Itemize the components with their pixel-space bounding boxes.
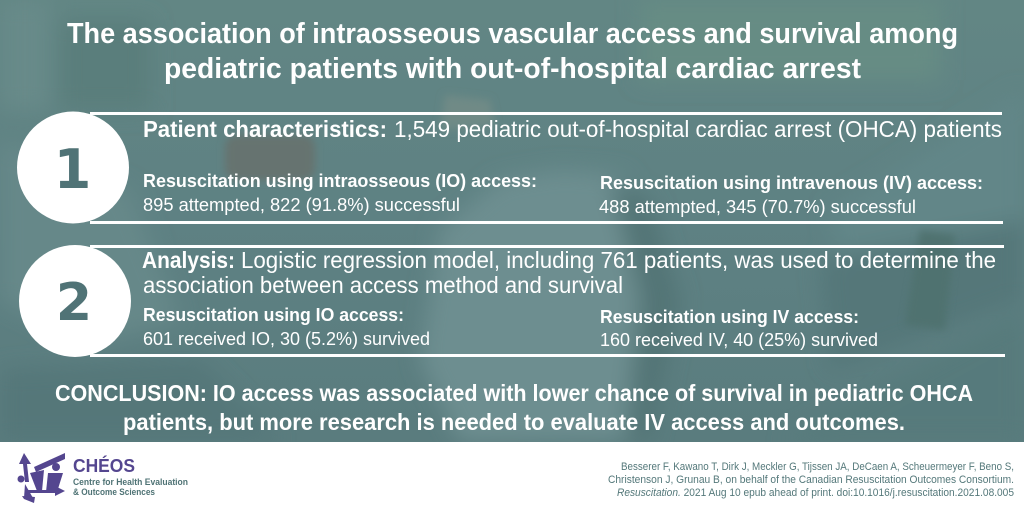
patient characteristics text: Patient characteristics:	[143, 116, 387, 142]
number badge 2	[19, 245, 131, 357]
icon: CHEOS logo mark	[18, 453, 65, 503]
IO survival stats	[143, 304, 430, 349]
conclusion	[55, 380, 973, 435]
conclusion: patients, but more research is needed to evaluate IV access and outcomes.	[123, 409, 905, 435]
patient characteristics text	[143, 116, 1002, 142]
IV survival stats: 160 received IV, 40 (25%) survived	[600, 329, 878, 350]
citation	[608, 461, 1014, 499]
patient characteristics text: 1,549 pediatric out-of-hospital cardiac arrest (OHCA) patients	[394, 116, 1002, 142]
IO survival stats: Resuscitation using IO access:	[143, 304, 404, 325]
analysis text: Logistic regression model, including 761 patients, was used to determine the	[241, 247, 996, 273]
intraosseous access stats	[143, 170, 537, 215]
intravenous access stats	[599, 172, 983, 217]
title: The association of intraosseous vascular access and survival among	[67, 18, 958, 50]
intravenous access stats: 488 attempted, 345 (70.7%) successful	[599, 196, 916, 217]
panel: patient characteristics	[17, 112, 1003, 224]
number badge 1: 1	[54, 138, 91, 201]
analysis text: Analysis:	[142, 247, 235, 273]
title	[67, 18, 958, 85]
CHEOS logo wordmark: & Outcome Sciences	[73, 487, 155, 497]
CHEOS logo wordmark: CHÉOS	[73, 455, 135, 476]
title: pediatric patients with out-of-hospital cardiac arrest	[164, 53, 861, 85]
intraosseous access stats: 895 attempted, 822 (91.8%) successful	[143, 194, 460, 215]
citation: Resuscitation. 2021 Aug 10 epub ahead of print. doi:10.1016/j.resuscitation.2021.08.005	[617, 487, 1014, 499]
number badge 1	[17, 112, 129, 224]
IV survival stats: Resuscitation using IV access:	[600, 306, 859, 327]
footer band	[0, 442, 1024, 512]
intravenous access stats: Resuscitation using intravenous (IV) access:	[600, 172, 983, 193]
intraosseous access stats: Resuscitation using intraosseous (IO) access:	[143, 170, 537, 191]
number badge 2: 2	[56, 273, 92, 333]
analysis text	[142, 247, 996, 298]
IO survival stats: 601 received IO, 30 (5.2%) survived	[143, 328, 430, 349]
panel: analysis	[19, 245, 1005, 357]
CHEOS logo wordmark	[73, 455, 188, 497]
conclusion: CONCLUSION: IO access was associated with lower chance of survival in pediatric OHCA	[55, 380, 973, 406]
CHEOS logo wordmark: Centre for Health Evaluation	[73, 477, 188, 487]
analysis text: association between access method and survival	[143, 272, 623, 298]
IV survival stats	[600, 306, 878, 350]
